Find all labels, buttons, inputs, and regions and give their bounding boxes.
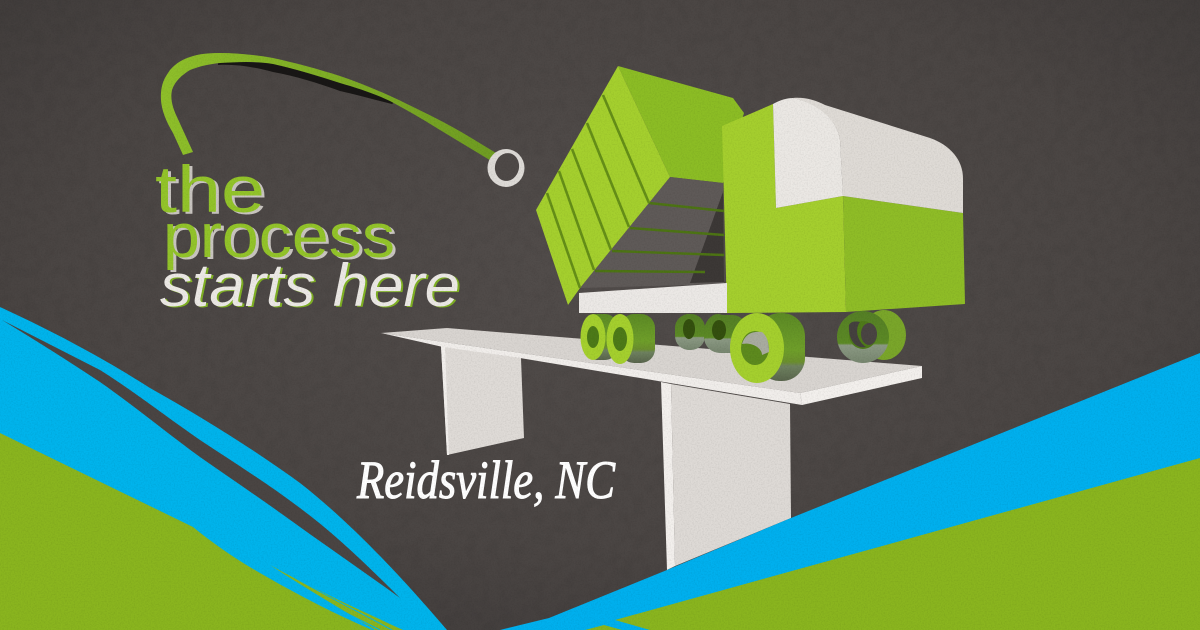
platform top xyxy=(381,328,922,405)
cab front green face xyxy=(722,104,846,313)
platform back support leg xyxy=(441,346,524,455)
cab white roof xyxy=(793,98,963,213)
dump bed slatted front xyxy=(536,66,670,305)
title text xyxy=(155,152,462,320)
swoosh: right green field xyxy=(615,458,1200,630)
word: process: process xyxy=(163,202,395,271)
swoosh: left blue band xyxy=(0,307,447,630)
cab side green face xyxy=(843,196,965,312)
word: process: process xyxy=(166,204,398,273)
swoosh: dark sliver in left band xyxy=(2,320,400,598)
word: the: the xyxy=(158,154,268,228)
swoosh: small green wedge xyxy=(585,625,622,630)
word: the: the xyxy=(155,152,265,226)
location label: Reidsville, NC xyxy=(356,450,616,510)
rear wheels far side xyxy=(675,314,748,353)
swoosh: right blue band xyxy=(500,353,1200,630)
swoosh: left green field xyxy=(0,433,372,630)
right rear wheel xyxy=(837,310,906,363)
cab white windscreen xyxy=(773,98,843,208)
chassis xyxy=(579,283,727,313)
front axle double wheels xyxy=(580,314,655,364)
swoosh: green shard with blue streaks xyxy=(270,565,403,630)
arc line xyxy=(161,53,496,162)
words: starts here: starts here xyxy=(162,253,462,320)
arc line shadow xyxy=(218,61,394,104)
ring at arc end xyxy=(488,149,524,187)
platform front support leg xyxy=(661,382,791,570)
big front wheel xyxy=(730,313,805,383)
dump truck illustration xyxy=(536,66,965,383)
words: starts here: starts here xyxy=(160,252,460,319)
dump bed underside xyxy=(580,177,724,288)
dump bed inner side xyxy=(618,66,744,183)
